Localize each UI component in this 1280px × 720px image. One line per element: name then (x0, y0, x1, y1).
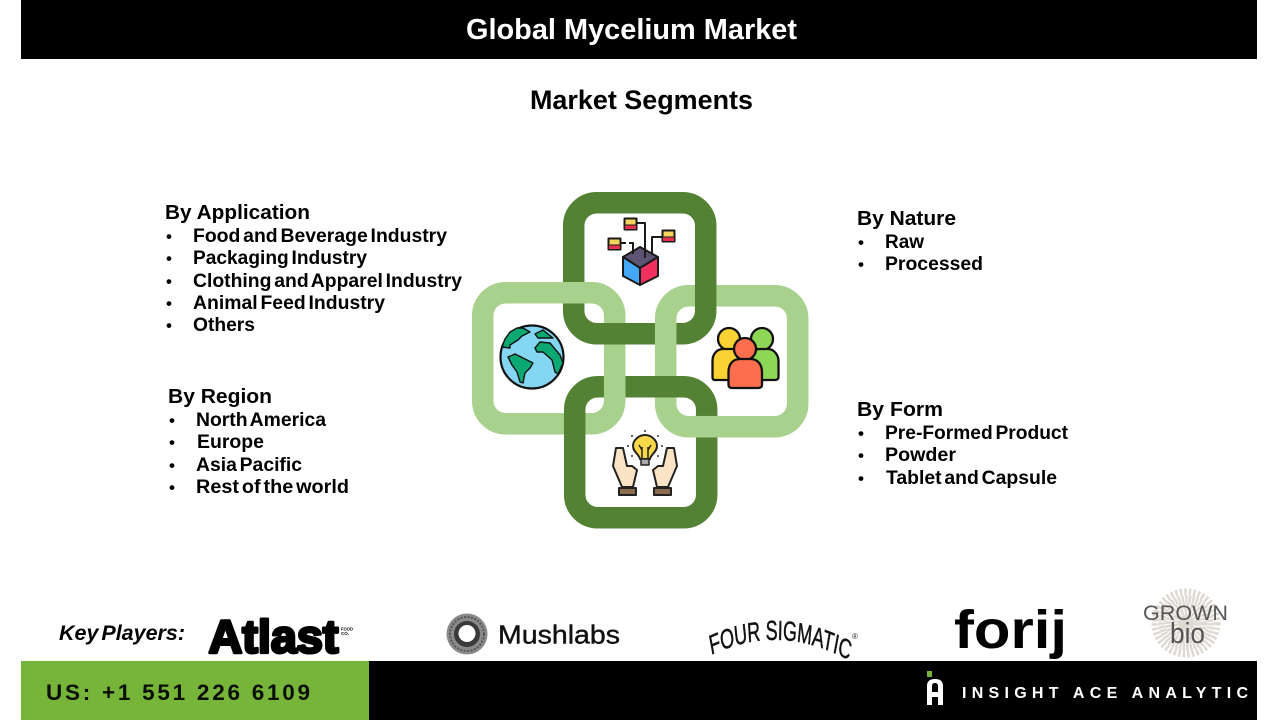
text block: by application: • (166, 316, 172, 335)
key players label: Key Players: (59, 621, 185, 645)
text block: by form: • (858, 424, 864, 443)
text block: by nature (857, 207, 983, 275)
text block: by application: • (166, 249, 172, 268)
text block: by region: Europe (197, 432, 264, 453)
text block: by form: • (858, 469, 864, 488)
icon: Insight Ace logo (927, 671, 943, 705)
logo: Atlast: Atlast (208, 610, 338, 662)
text block: by application: • (166, 227, 172, 246)
text block: by application: Animal Feed Industry (193, 293, 385, 314)
text block: by nature: Raw (885, 232, 924, 253)
text block: by nature: By Nature (857, 207, 956, 230)
footer bar (21, 661, 1257, 720)
text block: by form: Powder (885, 445, 957, 466)
text block: by nature: • (858, 233, 864, 252)
text block: by region: • (169, 411, 175, 430)
text block: by application: Others (193, 315, 255, 336)
brand name: INSIGHT ACE ANALYTIC (962, 685, 1248, 702)
interlocking rings diagram (483, 203, 798, 518)
text block: by application: Food and Beverage Industry (193, 226, 447, 247)
text block: by region: Asia Pacific (196, 455, 302, 476)
text block: by application: By Application (165, 201, 310, 224)
text block: by form: Tablet and Capsule (886, 468, 1057, 489)
text block: by nature: • (858, 255, 864, 274)
text block: by application: Clothing and Apparel Industry (193, 271, 462, 292)
logo: Mushlabs (446, 614, 620, 654)
text block: by form: By Form (857, 398, 943, 421)
logo: Grown bio (1143, 592, 1228, 654)
logo: Four Sigmatic: FOUR SIGMATIC (709, 620, 852, 658)
logo: Four Sigmatic: ® (852, 632, 858, 641)
title: Global Mycelium Market (466, 14, 797, 46)
logo: Atlast: FOOD (341, 626, 354, 632)
text block: by form: Pre-Formed Product (885, 423, 1069, 444)
text block: by region: North America (196, 410, 326, 431)
text block: by form: • (858, 446, 864, 465)
icon: hands holding light bulb (613, 430, 677, 495)
text block: by region: Rest of the world (196, 477, 349, 498)
text block: by region: By Region (168, 385, 272, 408)
text block: by application: • (166, 294, 172, 313)
text block: by region: • (169, 478, 175, 497)
icon: globe (500, 326, 564, 388)
text block: by region: • (169, 433, 175, 452)
text block: by application (165, 201, 462, 336)
section heading: Market Segments (530, 85, 753, 115)
logo: Atlast: CO. (341, 631, 349, 636)
phone number: US: +1 551 226 6109 (46, 680, 310, 705)
text block: by application: Packaging Industry (193, 248, 367, 269)
text block: by region (168, 385, 349, 498)
icon: product cube with connected tags (608, 218, 674, 285)
text block: by region: • (169, 456, 175, 475)
logo: forij: forij (954, 600, 1067, 660)
icon: group of people (712, 328, 778, 388)
logo: Grown bio: GROWN (1143, 602, 1228, 625)
text block: by application: • (166, 272, 172, 291)
text block: by nature: Processed (885, 254, 983, 275)
header bar (21, 0, 1257, 59)
logo: Grown bio: bio (1170, 618, 1205, 650)
logo: Mushlabs: Mushlabs (498, 620, 620, 650)
text block: by form (857, 398, 1069, 489)
